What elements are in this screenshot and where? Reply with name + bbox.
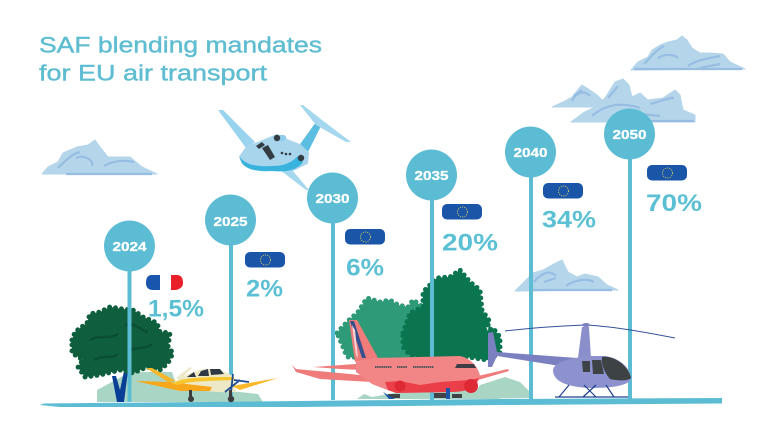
marker: 2050: 2050 bbox=[612, 127, 646, 142]
marker: 2030 bbox=[307, 172, 358, 224]
icon: helicopter bbox=[488, 323, 675, 397]
value: 2%: 2% bbox=[246, 276, 283, 302]
value: 1,5%: 1,5% bbox=[148, 296, 204, 322]
value: 34%: 34% bbox=[542, 206, 596, 234]
bushes: ground vegetation bbox=[97, 372, 532, 402]
flag: EU 2050 bbox=[647, 165, 687, 180]
tree: light middle bbox=[337, 298, 430, 360]
marker: 2035 bbox=[406, 150, 457, 200]
marker: 2030: 2030 bbox=[316, 191, 350, 206]
title: SAF blending mandates bbox=[39, 33, 322, 58]
cloud: left bbox=[42, 140, 157, 174]
marker: 2050 bbox=[604, 108, 655, 160]
flag: EU 2040 bbox=[543, 183, 583, 198]
marker: 2024 bbox=[104, 220, 155, 272]
title: for EU air transport bbox=[39, 61, 267, 86]
value: 6%: 6% bbox=[346, 254, 384, 282]
marker: 2040 bbox=[505, 126, 556, 178]
tree: dark left bbox=[72, 307, 173, 402]
title bbox=[39, 33, 322, 86]
cloud: middle large bbox=[571, 79, 695, 122]
marker: 2025: 2025 bbox=[214, 214, 248, 229]
marker: 2040: 2040 bbox=[514, 145, 548, 160]
timeline: poles bbox=[128, 138, 632, 402]
cloud: top right bbox=[631, 36, 745, 70]
ground line bbox=[40, 398, 722, 407]
flag: EU 2035 bbox=[442, 204, 482, 220]
marker: 2024: 2024 bbox=[112, 239, 147, 254]
marker: 2025 bbox=[205, 194, 256, 246]
marker: 2035: 2035 bbox=[414, 168, 448, 183]
icon: red airliner bbox=[292, 320, 509, 399]
tree: dark right bbox=[403, 270, 500, 360]
flag: EU 2025 bbox=[245, 252, 285, 268]
value: 70%: 70% bbox=[646, 190, 702, 217]
icon: yellow plane bbox=[135, 367, 278, 402]
flag: EU 2030 bbox=[345, 229, 385, 244]
cloud: lower bbox=[515, 260, 618, 291]
value: 20%: 20% bbox=[442, 230, 498, 256]
flag: France bbox=[146, 275, 183, 290]
icon: jet bbox=[218, 105, 351, 190]
cloud: middle small bbox=[552, 85, 620, 107]
